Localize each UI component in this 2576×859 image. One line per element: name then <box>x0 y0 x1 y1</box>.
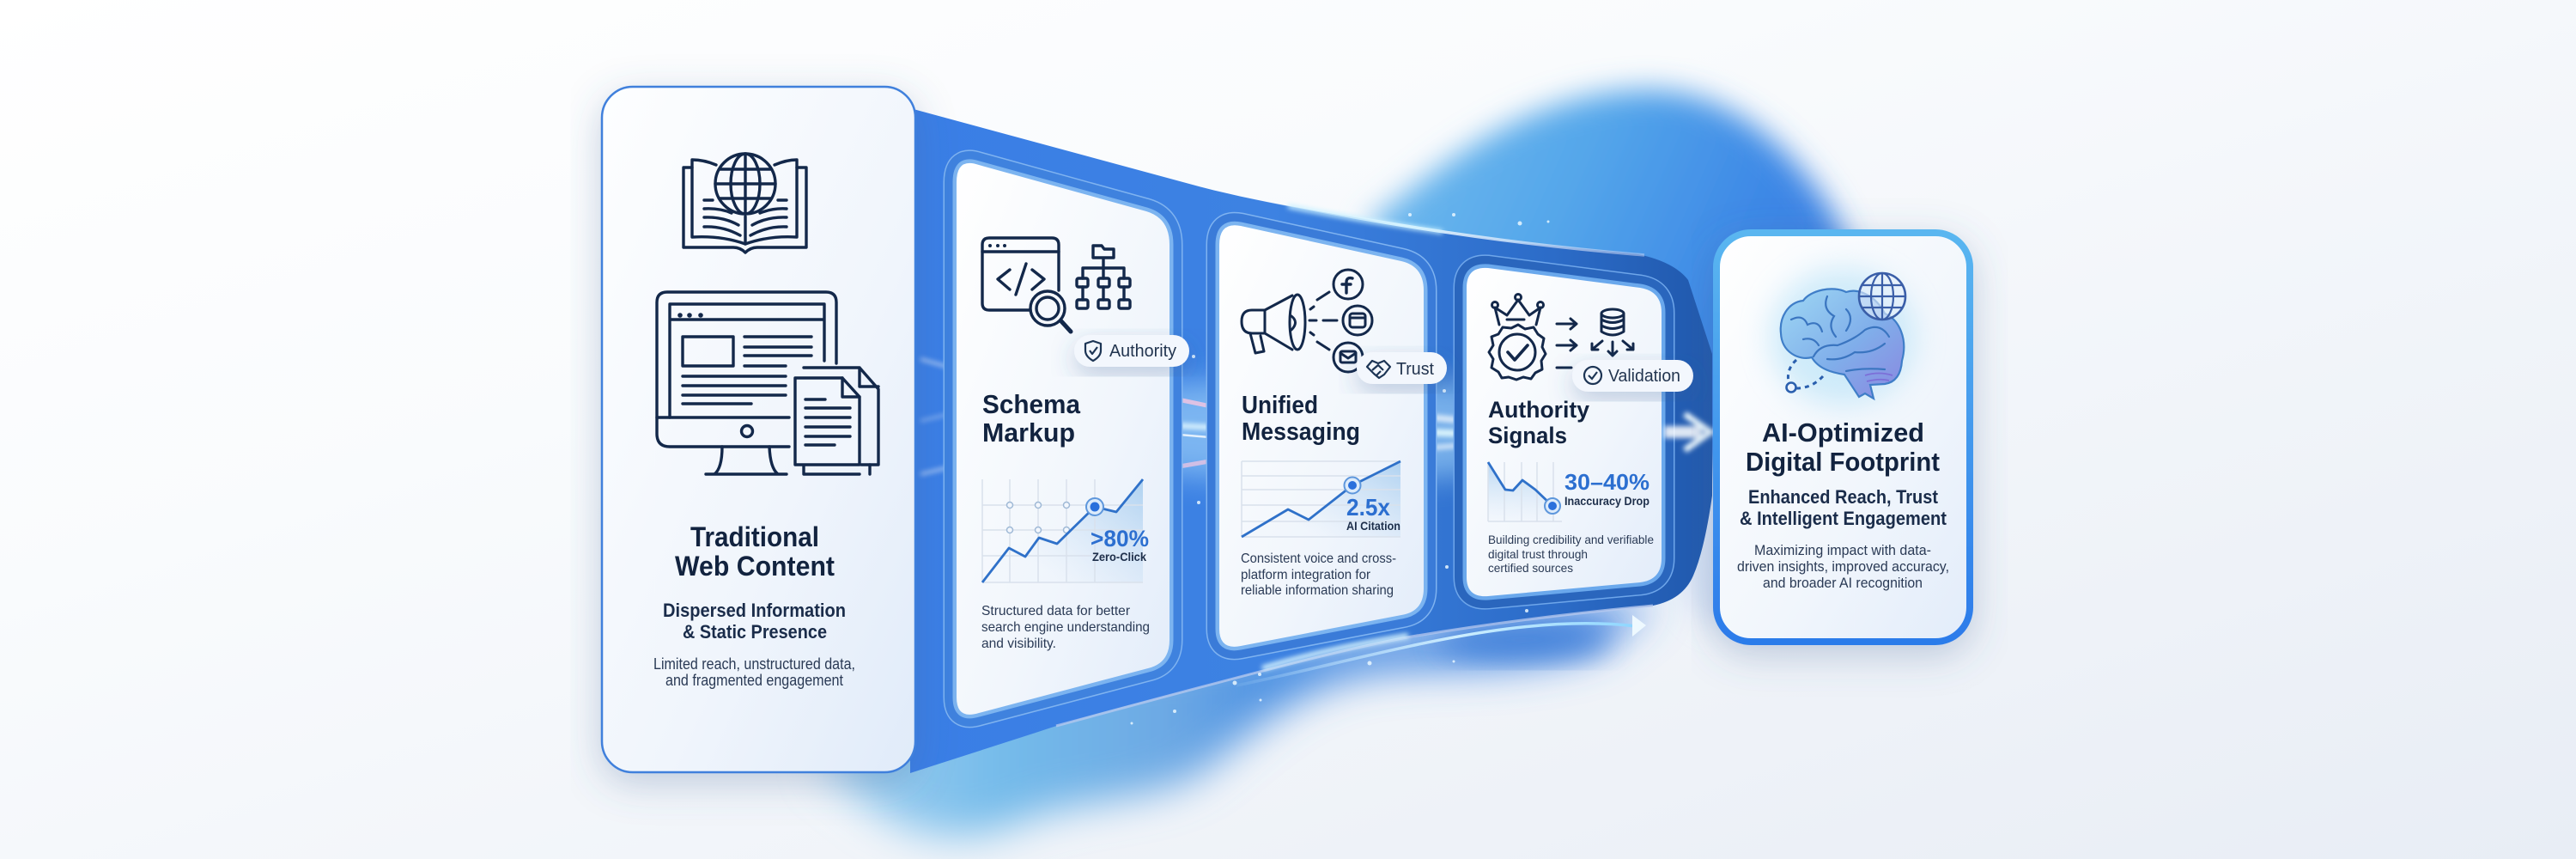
badge: authority <box>1074 335 1189 367</box>
description: traditional <box>653 655 855 689</box>
chart: inaccuracy drop <box>1488 462 1562 521</box>
sparkle dots <box>1130 213 1549 725</box>
unified card frame <box>1219 225 1424 647</box>
panel: authority signals <box>1467 268 1662 596</box>
stat: 2.5x AI citation <box>1346 494 1400 533</box>
stat: >80% zero-click: >80% <box>1091 526 1149 551</box>
description: schema: Structured data for better <box>981 604 1131 618</box>
chart: AI citation growth <box>1242 461 1400 537</box>
panel: traditional web content <box>602 87 915 772</box>
heading: authority signals <box>1488 397 1589 448</box>
heading: authority signals: Authority <box>1488 397 1589 423</box>
stat: 30–40% inaccuracy drop: Inaccuracy Drop <box>1564 494 1649 508</box>
badge: authority: Authority <box>1109 342 1176 361</box>
chart: zero-click growth <box>982 479 1143 582</box>
badge: trust: Trust <box>1396 360 1434 379</box>
icon: open book with globe <box>683 154 806 253</box>
ribbon band <box>910 108 1712 773</box>
subheading: enhanced reach <box>1740 486 1947 529</box>
stat: 30–40% inaccuracy drop: 30–40% <box>1564 469 1649 495</box>
stat: >80% zero-click: Zero-Click <box>1092 550 1146 564</box>
flow streaks <box>920 194 1653 726</box>
dark shadow lobe under ribbon <box>1438 621 1610 659</box>
light glow in ribbon centre <box>1039 378 1606 481</box>
heading: AI-optimized digital footprint: Digital Footprint <box>1746 447 1940 477</box>
icon: glowing brain with globe <box>1770 268 1916 405</box>
subheading: dispersed information: & Static Presence <box>683 621 827 643</box>
description: schema: and visibility. <box>981 637 1056 651</box>
stat: >80% zero-click <box>1091 526 1149 564</box>
stat: 30–40% inaccuracy drop <box>1564 469 1649 508</box>
icon: megaphone with channels <box>1242 270 1372 372</box>
description: unified: Consistent voice and cross- <box>1241 551 1396 566</box>
traditional card face <box>602 87 915 772</box>
blue blob: lower lobe <box>816 601 1657 836</box>
heading: schema markup: Markup <box>982 417 1075 448</box>
badge: validation: Validation <box>1608 367 1680 386</box>
arrow: bottom flow arrow tip <box>1632 615 1646 637</box>
description: unified <box>1241 551 1396 598</box>
stat: 2.5x AI citation: 2.5x <box>1346 494 1390 521</box>
badge: trust <box>1357 352 1447 384</box>
panel: schema markup <box>957 163 1170 715</box>
subheading: enhanced reach: & Intelligent Engagement <box>1740 508 1947 529</box>
panel: AI-optimized digital footprint <box>1716 233 1970 642</box>
description: final: and broader AI recognition <box>1763 575 1923 591</box>
subheading: dispersed information: Dispersed Information <box>663 600 846 621</box>
heading: unified messaging: Messaging <box>1242 418 1360 446</box>
description: unified: reliable information sharing <box>1241 583 1394 598</box>
icon: code window with magnifier and site tree <box>982 238 1130 332</box>
icon: desktop monitor with documents <box>657 292 878 474</box>
heading: unified messaging <box>1242 392 1360 446</box>
soft haze right of ribbon <box>1674 472 1777 627</box>
description: traditional: Limited reach, unstructured data, <box>653 655 855 673</box>
icon: crown seal with data flow <box>1489 294 1633 380</box>
unified card face <box>1219 225 1424 647</box>
schema card face <box>957 163 1170 715</box>
heading: authority signals: Signals <box>1488 423 1567 448</box>
authority card frame <box>1467 268 1662 596</box>
heading: traditional web content <box>675 521 835 582</box>
description: authority: Building credibility and verifiable <box>1488 533 1654 546</box>
schema card frame <box>957 163 1170 715</box>
heading: unified messaging: Unified <box>1242 392 1318 419</box>
heading: schema markup: Schema <box>982 389 1081 419</box>
badge: validation <box>1572 360 1693 392</box>
heading: traditional web content: Web Content <box>675 551 835 582</box>
heading: schema markup <box>982 389 1081 448</box>
authority card face <box>1467 268 1662 596</box>
description: schema: search engine understanding <box>981 620 1150 635</box>
heading: AI-optimized digital footprint: AI-Optimized <box>1762 417 1924 448</box>
final card face <box>1716 233 1970 642</box>
description: final: driven insights, improved accuracy, <box>1737 558 1949 575</box>
subheading: enhanced reach: Enhanced Reach, Trust <box>1748 486 1939 508</box>
description: final: Maximizing impact with data- <box>1754 542 1931 558</box>
blue blob: upper lobe <box>1365 90 1862 481</box>
description: schema <box>981 604 1150 651</box>
heading: traditional web content: Traditional <box>690 521 819 552</box>
description: authority: certified sources <box>1488 561 1573 575</box>
panel: unified messaging <box>1219 225 1424 647</box>
description: unified: platform integration for <box>1241 568 1370 582</box>
description: final <box>1737 542 1949 591</box>
heading: AI-optimized digital footprint <box>1746 417 1940 477</box>
stat: 2.5x AI citation: AI Citation <box>1346 519 1400 533</box>
subheading: dispersed information <box>663 600 846 643</box>
description: traditional: and fragmented engagement <box>665 672 843 689</box>
arrow: into final card <box>1664 414 1710 450</box>
description: authority: digital trust through <box>1488 547 1588 561</box>
description: authority <box>1488 533 1654 575</box>
